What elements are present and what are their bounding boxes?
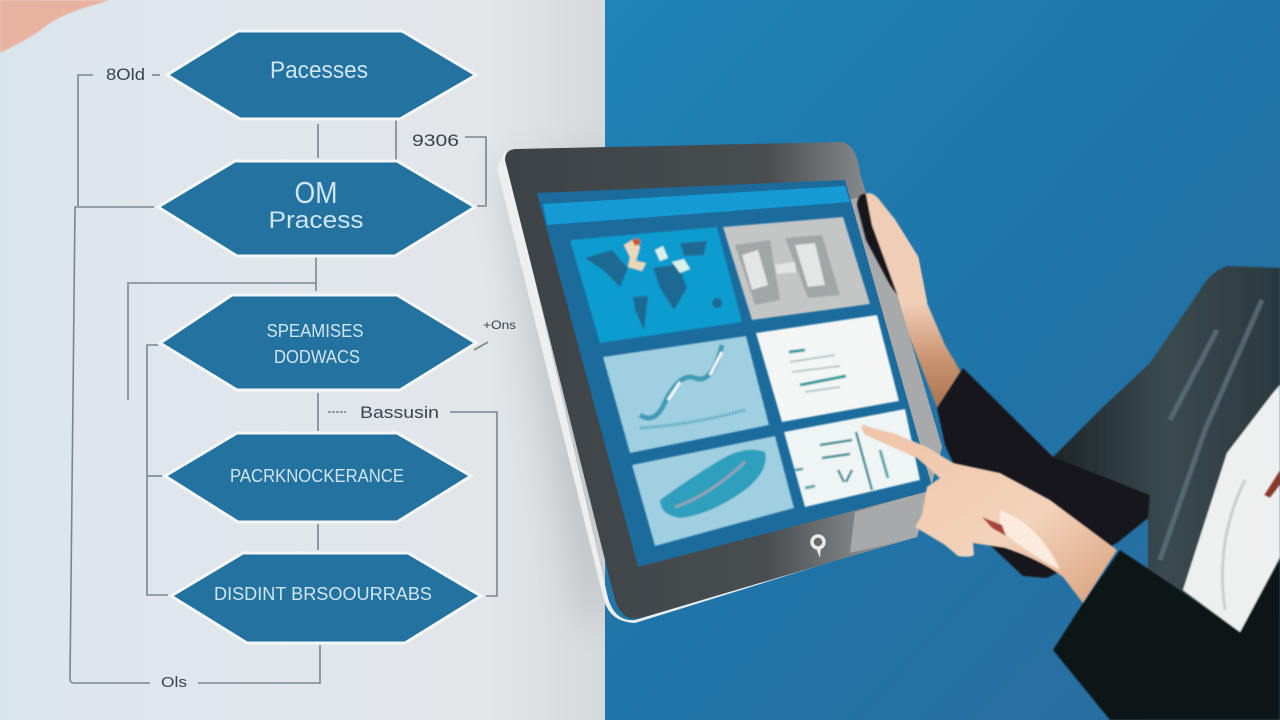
flowchart step 3 [160,295,476,390]
tablet right edge [848,195,942,553]
back hand thumb gripping tablet [857,193,927,303]
flowchart step 4: PACRKNOCKERANCE [230,466,404,486]
hand highlight [1000,510,1060,570]
pointing hand [862,424,1117,603]
flowchart step 4 [165,433,471,522]
screen tile: grey photo [723,217,870,320]
tablet body [497,142,942,623]
icon: hand at top left corner [0,0,110,53]
flowchart step 5 [171,553,481,643]
label: bottom loop: Ols [161,674,187,691]
label: top left: 8Old [106,65,145,84]
tie accent [1264,470,1280,498]
woman: jacket and sleeves [937,266,1280,720]
right blue background panel [605,0,1280,720]
screen header bar [543,186,850,225]
flowchart step 2: OM [294,175,338,210]
left light background panel [0,0,606,720]
jacket fold highlight [1160,300,1262,560]
flowchart step 1 [167,31,476,119]
flowchart step 1: Pacesses [270,57,368,84]
home button icon [812,536,824,558]
knuckle crease [982,517,1006,536]
screen tile: blue shape [632,436,794,546]
screen tile: white stats [784,409,920,507]
tablet drop shadow [500,150,605,620]
label: step 3 to 4: Bassusin [360,403,439,422]
tablet rear grip strip [857,194,898,296]
screen tile: line chart [603,336,769,453]
upper arm sleeve [937,368,1150,578]
shirt fold [1222,480,1245,610]
flowchart step 3: SPEAMISES [266,321,364,341]
flowchart step 5: DISDINT BRSOOURRABS [214,584,432,604]
label: step 3 right: +Ons [483,318,516,332]
white shirt [1183,385,1280,632]
flowchart step 2: Pracess [268,207,364,234]
screen tile: world map [570,227,742,343]
tablet white rim [497,150,850,623]
tablet bezel [505,142,942,619]
flowchart connector lines [70,75,497,683]
flowchart step 3: DODWACS [274,347,360,367]
label: top right: 9306 [412,131,459,150]
screen tile: white report [756,315,899,422]
forearm sleeve [1053,550,1280,720]
tablet blue screen [537,180,933,567]
back hand forearm [893,217,961,410]
flowchart step 2 [158,161,475,256]
